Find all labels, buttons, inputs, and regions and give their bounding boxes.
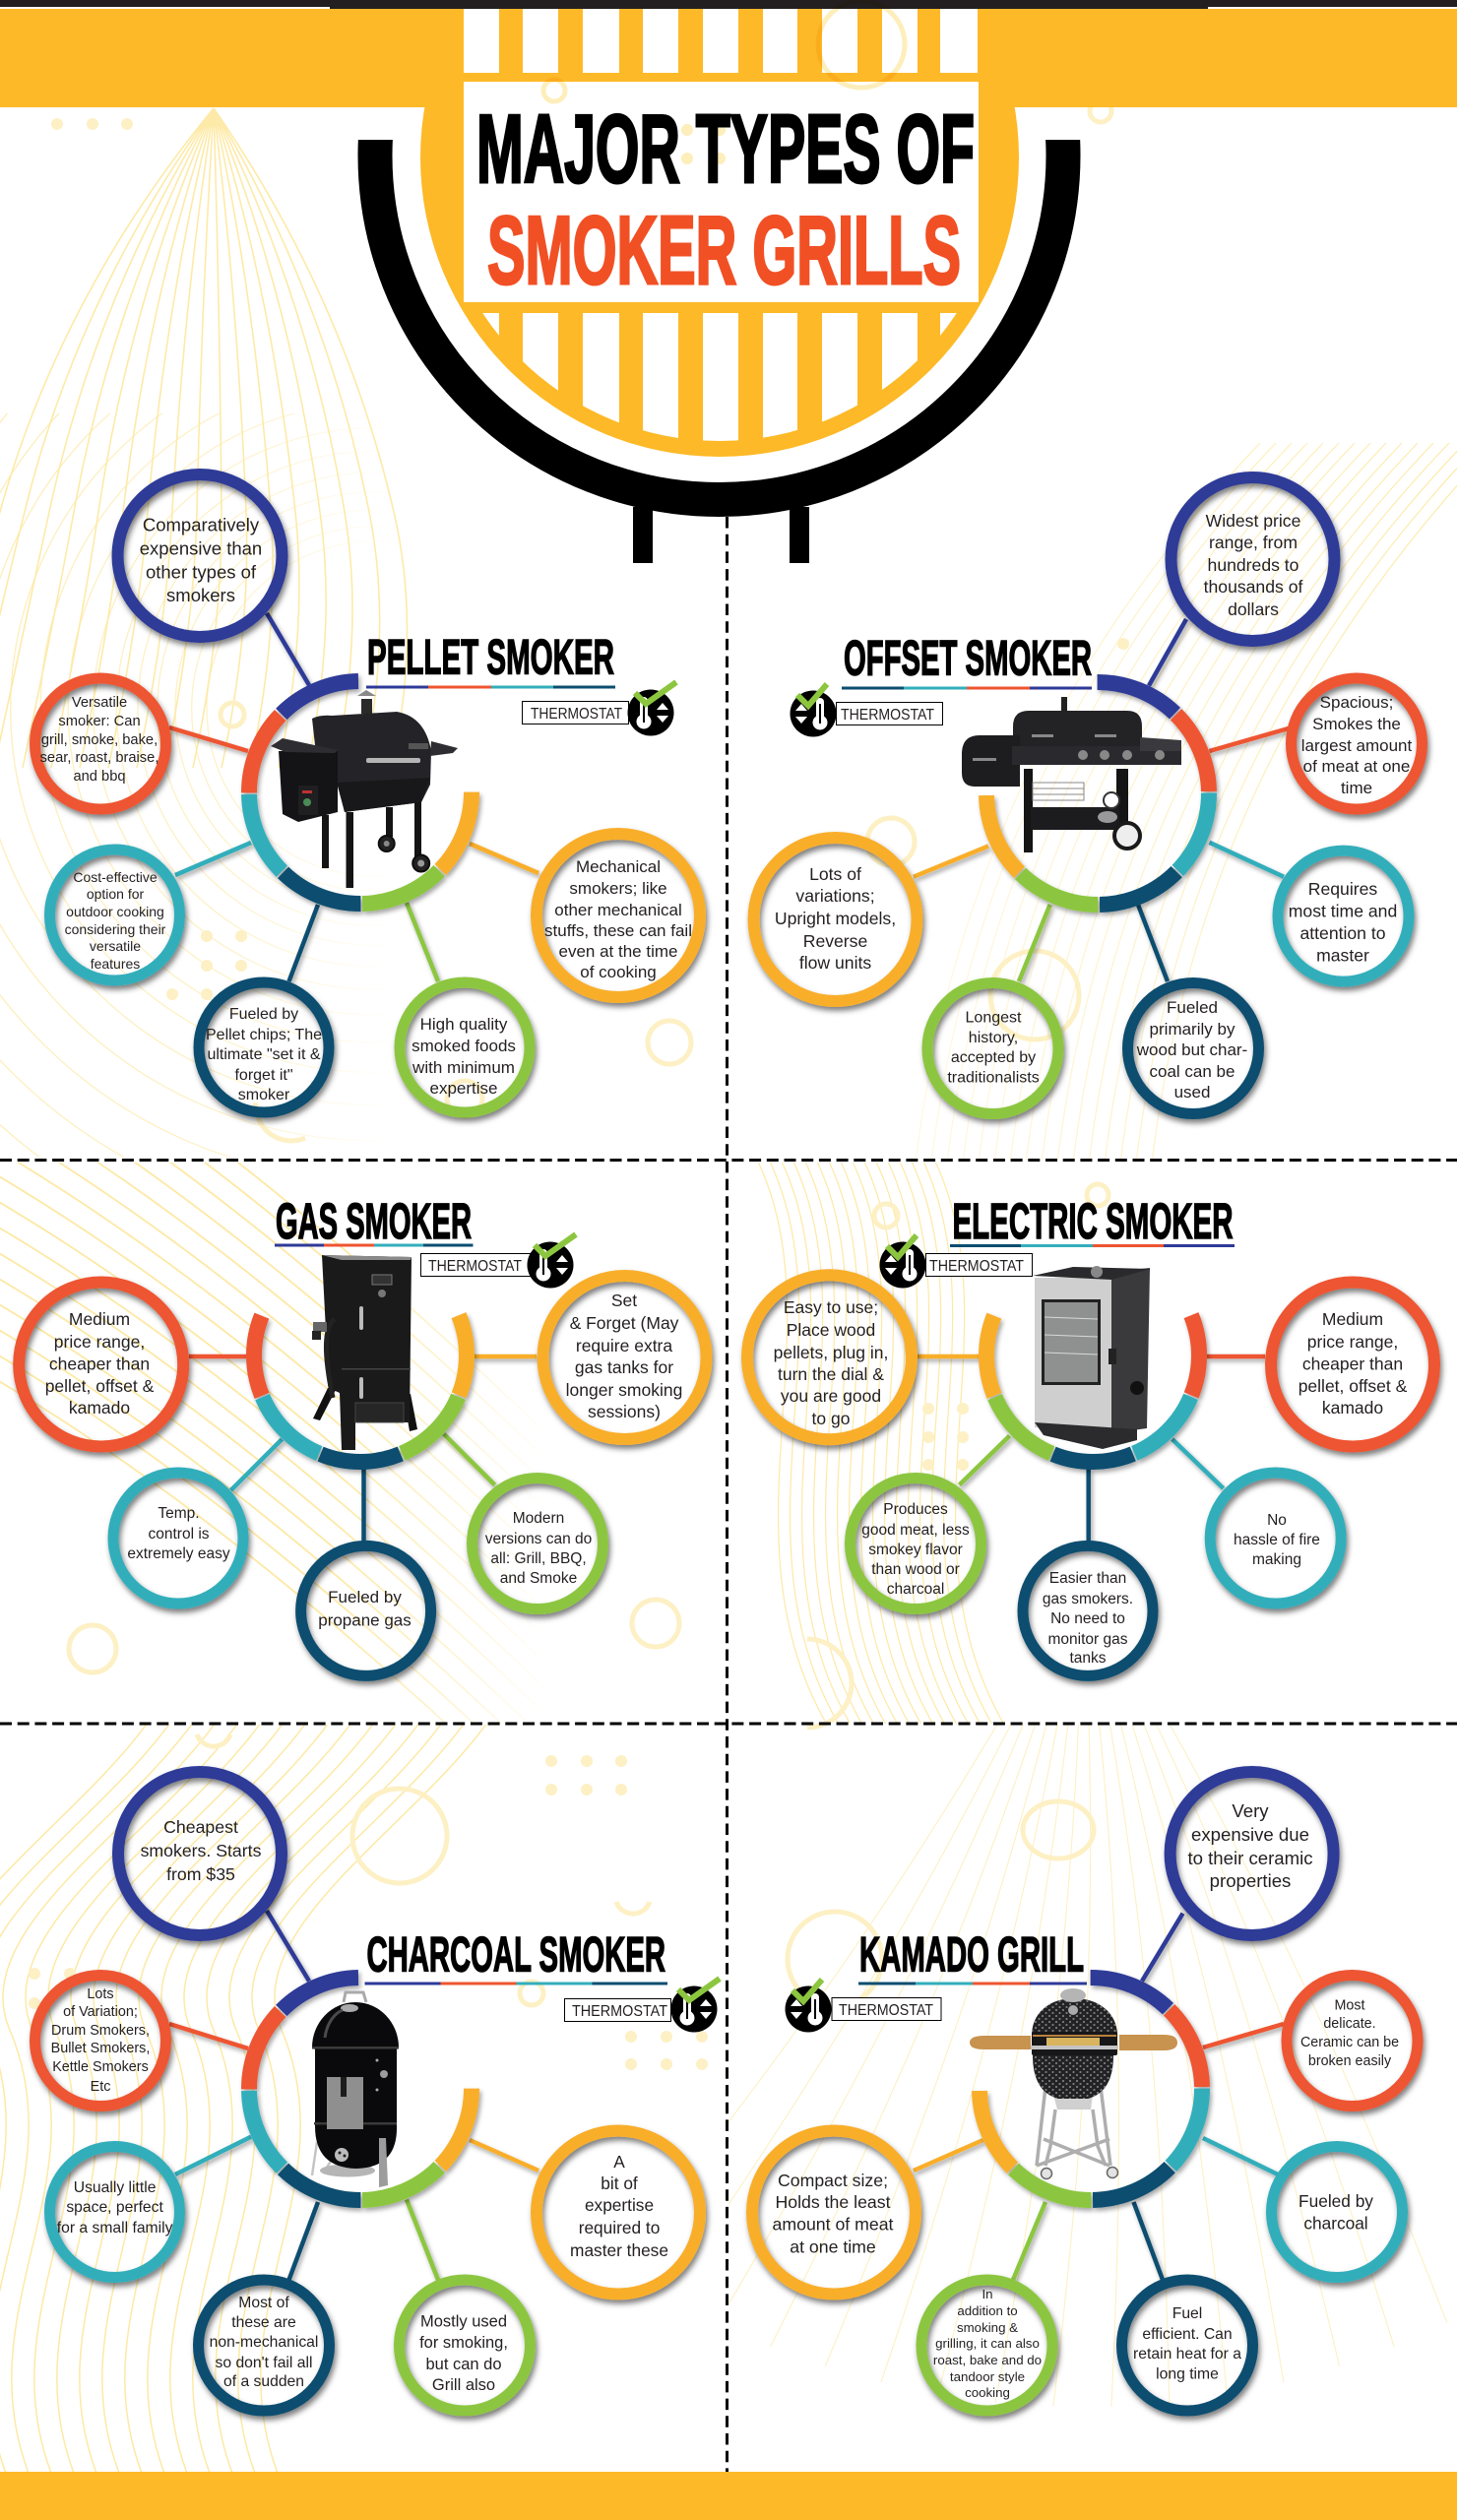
bubble: compact: amount of meat xyxy=(773,2215,894,2235)
bubble: versions: versions can do xyxy=(485,1531,592,1547)
segmented ring xyxy=(933,1931,1248,2246)
segmented ring xyxy=(203,1931,518,2246)
bubble: variation: Drum Smokers, xyxy=(51,2023,150,2039)
bubble: variations: Upright models, xyxy=(775,909,896,928)
lower grill bars xyxy=(482,313,957,441)
connectors xyxy=(169,613,538,981)
bubble: price: expensive than xyxy=(140,537,262,559)
bubble: addition: cooking xyxy=(965,2385,1010,2400)
bubble: price: cheaper than xyxy=(49,1354,150,1374)
bubble: easy: you are good xyxy=(781,1386,881,1406)
bubble: cost: considering their xyxy=(65,921,166,937)
bubble: variation: Bullet Smokers, xyxy=(51,2041,150,2056)
bubble: versatile: grill, smoke, bake, xyxy=(41,732,158,748)
heading: electric smoker: ELECTRIC SMOKER xyxy=(953,1193,1233,1249)
grill legs xyxy=(633,507,809,563)
bubble: mechanical: other mechanical xyxy=(554,901,682,919)
bubble: smoking xyxy=(400,2280,530,2411)
bubble: fuel: wood but char- xyxy=(1136,1040,1247,1059)
bubble: delicate: delicate. xyxy=(1323,2016,1376,2032)
bubble: fuel: propane gas xyxy=(318,1610,412,1630)
bubble: charcoal fuel: charcoal xyxy=(1303,2213,1368,2233)
bubble: fuel: Pellet chips; The xyxy=(206,1027,322,1043)
bubble: variation: Lots xyxy=(87,1986,114,2002)
bubble: space: for a small family xyxy=(57,2220,173,2236)
bubble: easier: gas smokers. xyxy=(1043,1591,1133,1607)
bubble: easier: Easier than xyxy=(1049,1570,1126,1587)
heading: kamado grill: KAMADO GRILL xyxy=(859,1927,1084,1983)
bubble: time xyxy=(1278,850,1409,981)
bubble: expertise: master these xyxy=(570,2240,668,2260)
bubble: hassle: making xyxy=(1252,1551,1301,1568)
bubble: fuel: primarily by xyxy=(1150,1020,1235,1039)
bubble: spacious: largest amount xyxy=(1301,736,1413,755)
icon: offset grill xyxy=(962,697,1181,852)
bubble: expensive: expensive due xyxy=(1191,1824,1309,1845)
bubble: spacious: Smokes the xyxy=(1312,715,1401,733)
heading: gas smoker: GAS SMOKER xyxy=(276,1193,472,1249)
bubble: cheapest xyxy=(118,1772,282,1935)
bubble: variations: flow units xyxy=(799,953,871,973)
bubble: price: Comparatively xyxy=(143,514,260,536)
bubble: fuel: ultimate "set it & xyxy=(207,1046,321,1063)
bubble: mechanical: stuffs, these can fail xyxy=(544,921,692,940)
bubble: expertise xyxy=(537,2130,700,2294)
title xyxy=(476,94,975,304)
bubble: mechanical: even at the time xyxy=(559,942,677,961)
bubble: set and forget: Set xyxy=(611,1291,637,1310)
bubble: smoking: but can do xyxy=(425,2356,502,2373)
bubble: price: kamado xyxy=(1322,1398,1383,1418)
bubble: smoking: Grill also xyxy=(432,2376,495,2394)
bubble: price xyxy=(19,1282,183,1447)
panel: offset smoker xyxy=(754,477,1422,1114)
bubble: set and forget xyxy=(543,1276,707,1439)
bubble: price: price range, xyxy=(54,1332,145,1352)
bubble: cheapest: Cheapest xyxy=(163,1817,238,1837)
bubble: hassle xyxy=(1210,1473,1341,1604)
bubble: mechanical: of cooking xyxy=(580,963,657,981)
bubble: fuel: forget it" xyxy=(234,1067,293,1084)
bubble: temp: control is xyxy=(148,1526,210,1543)
bubble: non-mechanical: these are xyxy=(231,2314,296,2331)
bubble: cost: features xyxy=(91,956,140,972)
bubble: non-mechanical: Most of xyxy=(238,2295,289,2311)
bubble: compact: at one time xyxy=(790,2236,876,2256)
bubble: quality xyxy=(400,982,530,1112)
bubble: non-mechanical xyxy=(199,2280,329,2411)
bubble: expensive: to their ceramic xyxy=(1187,1848,1313,1868)
bubble: quality: expertise xyxy=(430,1079,497,1098)
bubble: easy: turn the dial & xyxy=(778,1364,884,1384)
bubble: space: Usually little xyxy=(74,2179,157,2196)
bubble: fuel xyxy=(1128,982,1258,1114)
bubble: variation: of Variation; xyxy=(63,2004,138,2020)
bubble: meat: smokey flavor xyxy=(868,1542,963,1558)
bubble: history: accepted by xyxy=(951,1049,1036,1066)
bubble: compact xyxy=(752,2130,916,2294)
thermostat badge xyxy=(522,682,676,736)
bubble: price: pellet, offset & xyxy=(1299,1376,1408,1396)
top grill bars xyxy=(464,9,978,73)
bubble: mechanical xyxy=(537,834,700,997)
bubble: addition xyxy=(921,2280,1052,2411)
bubble: efficient: efficient. Can xyxy=(1142,2326,1233,2343)
bubble: set and forget: sessions) xyxy=(588,1402,661,1421)
icon: electric smoker xyxy=(1033,1266,1151,1449)
icon: pellet grill xyxy=(271,690,458,888)
bubble: expertise: expertise xyxy=(585,2195,654,2215)
bubble: versions: all: Grill, BBQ, xyxy=(490,1550,587,1567)
bubble: temp: Temp. xyxy=(158,1505,200,1522)
bubble: addition: tandoor style xyxy=(950,2369,1025,2384)
bubble: cost: Cost-effective xyxy=(73,869,158,885)
bubble: history: traditionalists xyxy=(947,1069,1040,1087)
bubble: variation: Kettle Smokers xyxy=(52,2059,149,2075)
bubble: variations: variations; xyxy=(795,886,875,906)
footer band xyxy=(0,2472,1457,2520)
bubble: history: history, xyxy=(969,1030,1018,1046)
bubble: fuel: used xyxy=(1174,1083,1210,1102)
bubble: fuel xyxy=(199,982,329,1112)
bubble: quality: High quality xyxy=(420,1015,508,1034)
bubble: easy: to go xyxy=(812,1409,850,1428)
bubble: addition: addition to xyxy=(957,2303,1018,2318)
bubble: compact: Compact size; xyxy=(778,2171,888,2190)
bubble: versions: Modern xyxy=(513,1510,564,1527)
bubble: versatile xyxy=(35,678,165,809)
icon: gas smoker xyxy=(312,1255,417,1450)
thermostat badge: THERMOSTAT xyxy=(531,706,622,723)
bubble: price: dollars xyxy=(1228,599,1279,619)
segmented ring xyxy=(953,1216,1233,1495)
icon: kamado grill xyxy=(970,1988,1177,2179)
bubble: easy: pellets, plug in, xyxy=(774,1343,888,1362)
bubble: hassle: No xyxy=(1267,1512,1287,1529)
bubble: mechanical: smokers; like xyxy=(569,879,667,898)
bubble: cost xyxy=(49,850,179,980)
bubble: smoking: Mostly used xyxy=(420,2313,507,2331)
bubble: meat: charcoal xyxy=(887,1581,944,1598)
heading: offset smoker xyxy=(842,630,1092,689)
heading: kamado grill xyxy=(858,1927,1087,1984)
bubble: delicate: Most xyxy=(1335,1998,1365,2014)
bubble: charcoal fuel: Fueled by xyxy=(1299,2191,1373,2211)
bubble: expensive xyxy=(1171,1772,1334,1935)
bubble: set and forget: gas tanks for xyxy=(575,1357,673,1377)
bubble: delicate: broken easily xyxy=(1308,2053,1392,2069)
thermostat badge: THERMOSTAT xyxy=(841,707,934,724)
thermostat badge xyxy=(880,1235,1032,1288)
bubble: space: space, perfect xyxy=(66,2199,164,2216)
bubble: cheapest: from $35 xyxy=(166,1864,235,1884)
bubble: temp: extremely easy xyxy=(127,1545,230,1562)
bubble: addition: roast, bake and do xyxy=(933,2353,1042,2367)
black grill bowl xyxy=(358,140,1081,517)
connectors xyxy=(914,1914,1284,2280)
bubble: delicate xyxy=(1287,1975,1418,2107)
bubble: time: master xyxy=(1316,945,1369,965)
bubble: temp xyxy=(113,1473,243,1604)
bubble: easier: monitor gas xyxy=(1048,1631,1128,1648)
bubble: time: Requires xyxy=(1308,879,1377,899)
bubble: variations xyxy=(754,838,918,1001)
bubble: spacious: time xyxy=(1341,779,1372,797)
bubble: easier xyxy=(1023,1545,1153,1675)
heading: pellet smoker: PELLET SMOKER xyxy=(367,630,614,685)
bubble: price: kamado xyxy=(69,1398,130,1418)
bubble: meat: Produces xyxy=(883,1501,948,1518)
panel: electric smoker xyxy=(747,1193,1434,1675)
bubble: spacious xyxy=(1292,678,1422,809)
segmented ring xyxy=(203,635,518,950)
bubble: price xyxy=(118,474,282,637)
bubble: fuel: smoker xyxy=(238,1087,290,1103)
bubble: easier: tanks xyxy=(1069,1650,1107,1667)
header: yellow band and grill title xyxy=(0,0,1457,563)
bubble: price: smokers xyxy=(166,585,235,605)
bubble: variations: Reverse xyxy=(803,931,867,951)
bubble: price: Medium xyxy=(1322,1309,1383,1329)
bubble: versatile: smoker: Can xyxy=(58,714,141,729)
panel: kamado grill xyxy=(752,1772,1418,2411)
bubble: versions xyxy=(473,1479,602,1608)
bubble: set and forget: & Forget (May xyxy=(570,1313,679,1333)
bubble: efficient xyxy=(1122,2280,1252,2411)
bubble: quality: with minimum xyxy=(412,1058,515,1077)
heading: pellet smoker xyxy=(366,630,615,689)
bubble: versatile: Versatile xyxy=(72,695,127,711)
bubble: time: attention to xyxy=(1299,923,1386,943)
bubble: cheapest: smokers. Starts xyxy=(141,1841,262,1860)
heading: offset smoker: OFFSET SMOKER xyxy=(844,630,1092,685)
bubble: fuel: Fueled by xyxy=(328,1588,402,1606)
bubble: smoking: for smoking, xyxy=(419,2334,508,2352)
bubble: fuel xyxy=(301,1545,431,1675)
title: MAJOR TYPES OF xyxy=(476,94,975,203)
heading: charcoal smoker: CHARCOAL SMOKER xyxy=(366,1927,665,1983)
bubble: price: hundreds to xyxy=(1208,555,1299,575)
thermostat badge xyxy=(421,1234,576,1288)
bubble: price: cheaper than xyxy=(1302,1354,1403,1374)
panel: gas smoker xyxy=(19,1193,706,1675)
segmented ring xyxy=(940,636,1255,951)
bubble: variations: Lots of xyxy=(809,864,861,884)
bubble: addition: In xyxy=(982,2287,993,2301)
bubble: price: other types of xyxy=(146,561,257,583)
bubble: price: range, from xyxy=(1209,533,1298,552)
heading: charcoal smoker xyxy=(364,1927,667,1984)
bubble: efficient: retain heat for a xyxy=(1133,2346,1241,2362)
bubble: meat: than wood or xyxy=(871,1561,960,1578)
icon: charcoal bullet smoker xyxy=(312,1992,399,2187)
thermostat badge xyxy=(565,1979,720,2032)
bubble: fuel: coal can be xyxy=(1150,1062,1235,1081)
bubble: price: Medium xyxy=(69,1309,130,1329)
bubble: quality: smoked foods xyxy=(412,1037,516,1055)
panel: charcoal smoker xyxy=(35,1772,720,2411)
bubble: easy: Place wood xyxy=(787,1320,875,1340)
bubble: spacious: Spacious; xyxy=(1320,693,1393,712)
bubble: expensive: Very xyxy=(1232,1800,1269,1821)
title: SMOKER GRILLS xyxy=(487,196,961,304)
bubble: easy: Easy to use; xyxy=(784,1297,878,1317)
bubble: expertise: required to xyxy=(579,2218,660,2237)
heading: gas smoker xyxy=(275,1193,473,1249)
bubble: delicate: Ceramic can be xyxy=(1300,2035,1399,2050)
connectors xyxy=(189,1356,537,1542)
bubble: set and forget: longer smoking xyxy=(566,1380,682,1400)
thermostat badge: THERMOSTAT xyxy=(839,2002,933,2019)
thermostat badge xyxy=(786,1980,941,2032)
bubble: efficient: long time xyxy=(1156,2366,1219,2382)
bubble: history xyxy=(927,982,1058,1114)
bubble: non-mechanical: of a sudden xyxy=(223,2373,304,2390)
bubble: expensive: properties xyxy=(1210,1870,1291,1891)
bubble: versions: and Smoke xyxy=(500,1570,577,1587)
bubble: versatile: sear, roast, braise, xyxy=(40,750,158,766)
bubble: fuel: Fueled by xyxy=(229,1006,298,1023)
thermostat badge xyxy=(790,684,943,736)
bubble: efficient: Fuel xyxy=(1172,2305,1202,2322)
connectors xyxy=(918,1356,1265,1542)
bubble: easier: No need to xyxy=(1050,1610,1125,1627)
bubble: easy xyxy=(747,1275,912,1439)
bubble: time: most time and xyxy=(1289,902,1397,921)
bubble: addition: smoking & xyxy=(957,2320,1018,2335)
bubble: price: Widest price xyxy=(1206,511,1300,531)
connectors xyxy=(914,619,1289,981)
bubble: variation: Etc xyxy=(91,2079,110,2095)
bubble: mechanical: Mechanical xyxy=(576,857,661,876)
bubble: set and forget: require extra xyxy=(576,1336,672,1355)
thermostat badge: THERMOSTAT xyxy=(572,2003,667,2020)
bubble: cost: outdoor cooking xyxy=(66,904,164,919)
bubble: fuel: Fueled xyxy=(1167,998,1218,1017)
bubble: cost: option for xyxy=(87,886,145,902)
bubble: compact: Holds the least xyxy=(776,2192,891,2212)
bubble: price: price range, xyxy=(1307,1332,1398,1352)
bubble: price xyxy=(1271,1282,1434,1447)
connectors xyxy=(169,1911,538,2280)
bubble: hassle: hassle of fire xyxy=(1234,1532,1320,1548)
bubble: versatile: and bbq xyxy=(73,769,126,785)
bubble: non-mechanical: non-mechanical xyxy=(210,2334,318,2351)
heading: electric smoker xyxy=(950,1193,1235,1249)
segmented ring xyxy=(221,1216,500,1495)
bubble: non-mechanical: so don't fail all xyxy=(216,2355,312,2371)
bubble: spacious: of meat at one xyxy=(1303,757,1410,776)
bubble: expertise: bit of xyxy=(601,2174,638,2193)
bubble: charcoal fuel xyxy=(1272,2146,1402,2278)
bubble: space xyxy=(49,2146,179,2278)
thermostat badge: THERMOSTAT xyxy=(428,1258,522,1275)
bubble: price: thousands of xyxy=(1204,577,1302,597)
bubble: meat xyxy=(851,1479,981,1608)
bubble: expertise: A xyxy=(613,2152,625,2172)
panel: pellet smoker xyxy=(35,474,700,1112)
thermostat badge: THERMOSTAT xyxy=(929,1258,1024,1275)
bubble: price: pellet, offset & xyxy=(45,1376,155,1396)
bubble: meat: good meat, less xyxy=(861,1522,970,1539)
bubble: addition: grilling, it can also xyxy=(935,2336,1040,2351)
bubble: variation xyxy=(35,1975,165,2107)
bubble: history: Longest xyxy=(966,1010,1022,1026)
bubble: price xyxy=(1172,477,1335,641)
bubble: cost: versatile xyxy=(90,938,141,954)
